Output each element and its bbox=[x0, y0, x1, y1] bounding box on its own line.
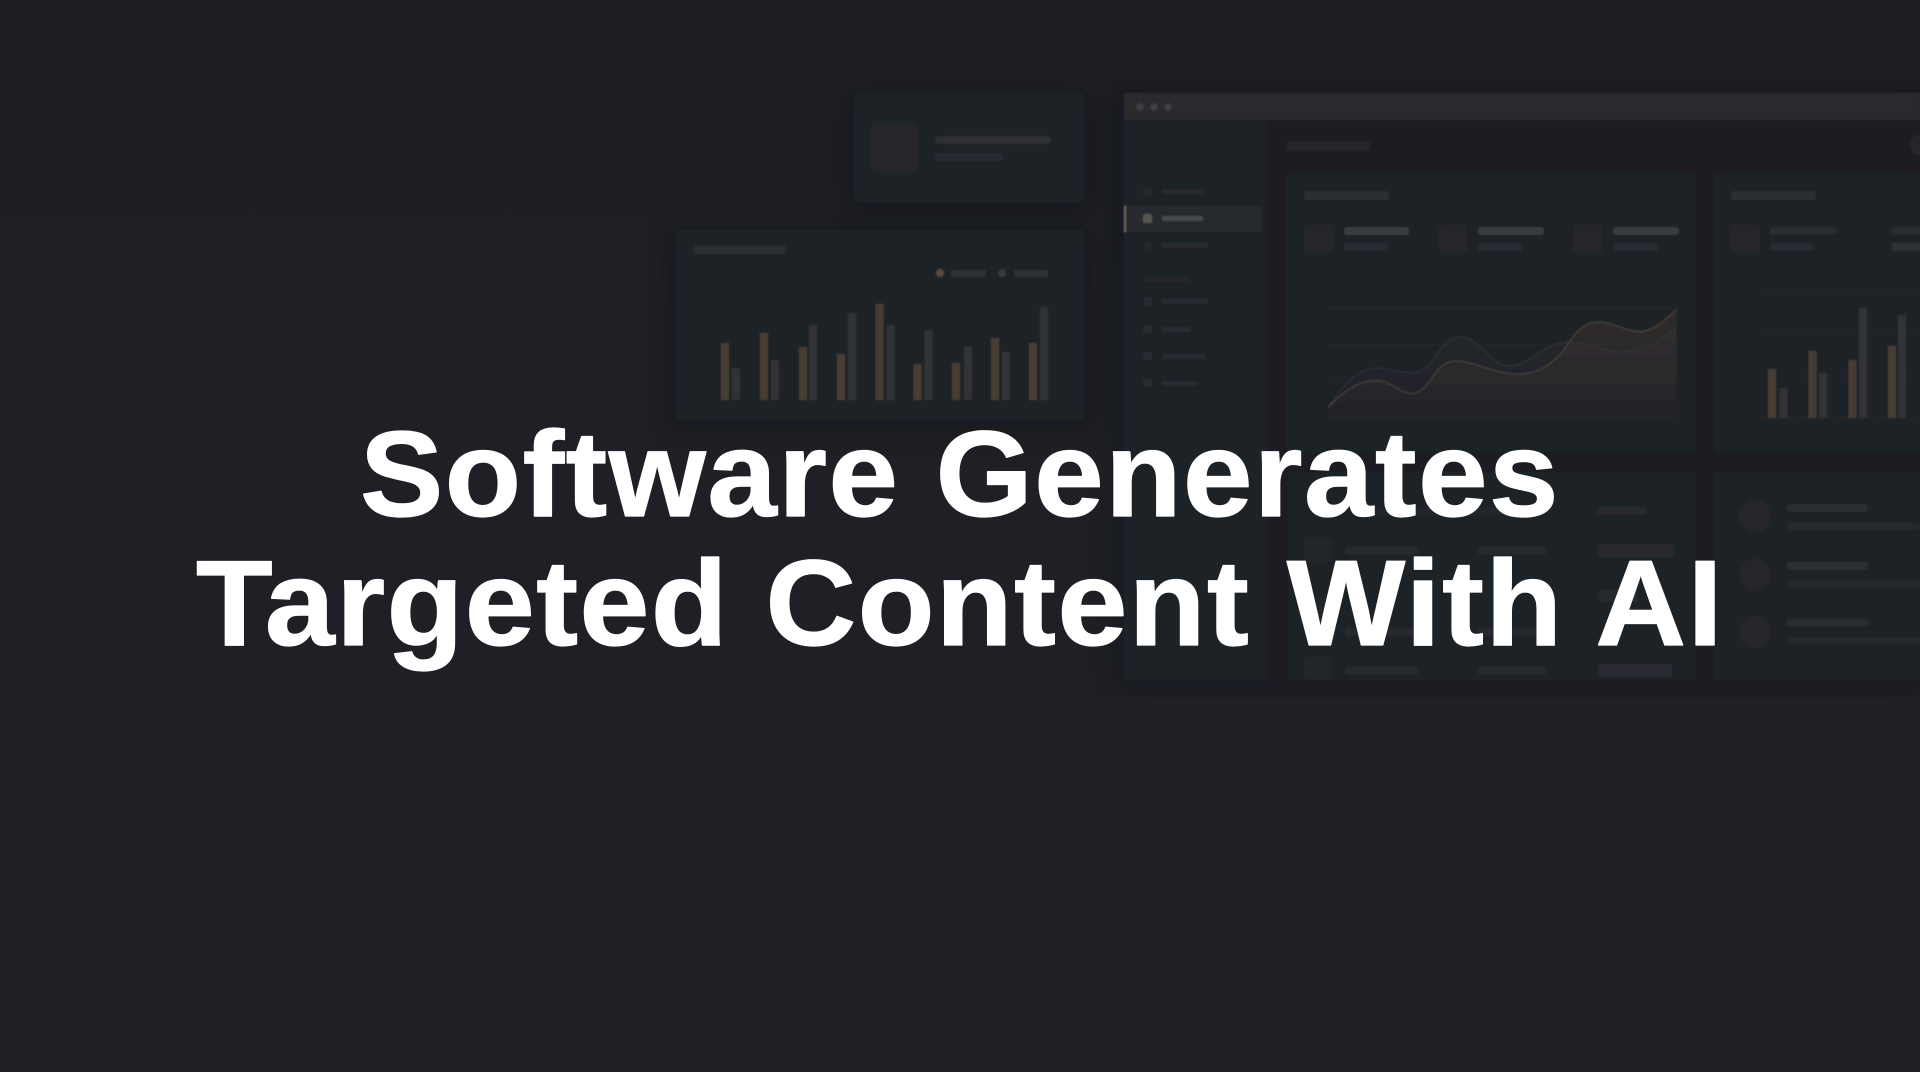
title line 2: Targeted Content With AI bbox=[196, 535, 1724, 671]
title line 1: Software Generates bbox=[360, 406, 1560, 542]
dashboard window bbox=[1118, 90, 1920, 686]
floating bar chart card bbox=[672, 230, 1088, 426]
floating profile card bbox=[850, 93, 1088, 210]
area chart curves bbox=[1328, 309, 1677, 418]
active menu item bbox=[1124, 206, 1262, 232]
faded dashboard illustration bbox=[672, 90, 1920, 686]
panel: area chart bbox=[1287, 173, 1696, 452]
panel: bar chart bbox=[1714, 173, 1920, 452]
panel: table bbox=[1288, 472, 1696, 680]
window title bar bbox=[1124, 93, 1920, 120]
main content area bbox=[1268, 120, 1920, 686]
panel: activity list bbox=[1714, 472, 1920, 680]
title bbox=[196, 406, 1724, 671]
sidebar bbox=[1124, 120, 1268, 680]
